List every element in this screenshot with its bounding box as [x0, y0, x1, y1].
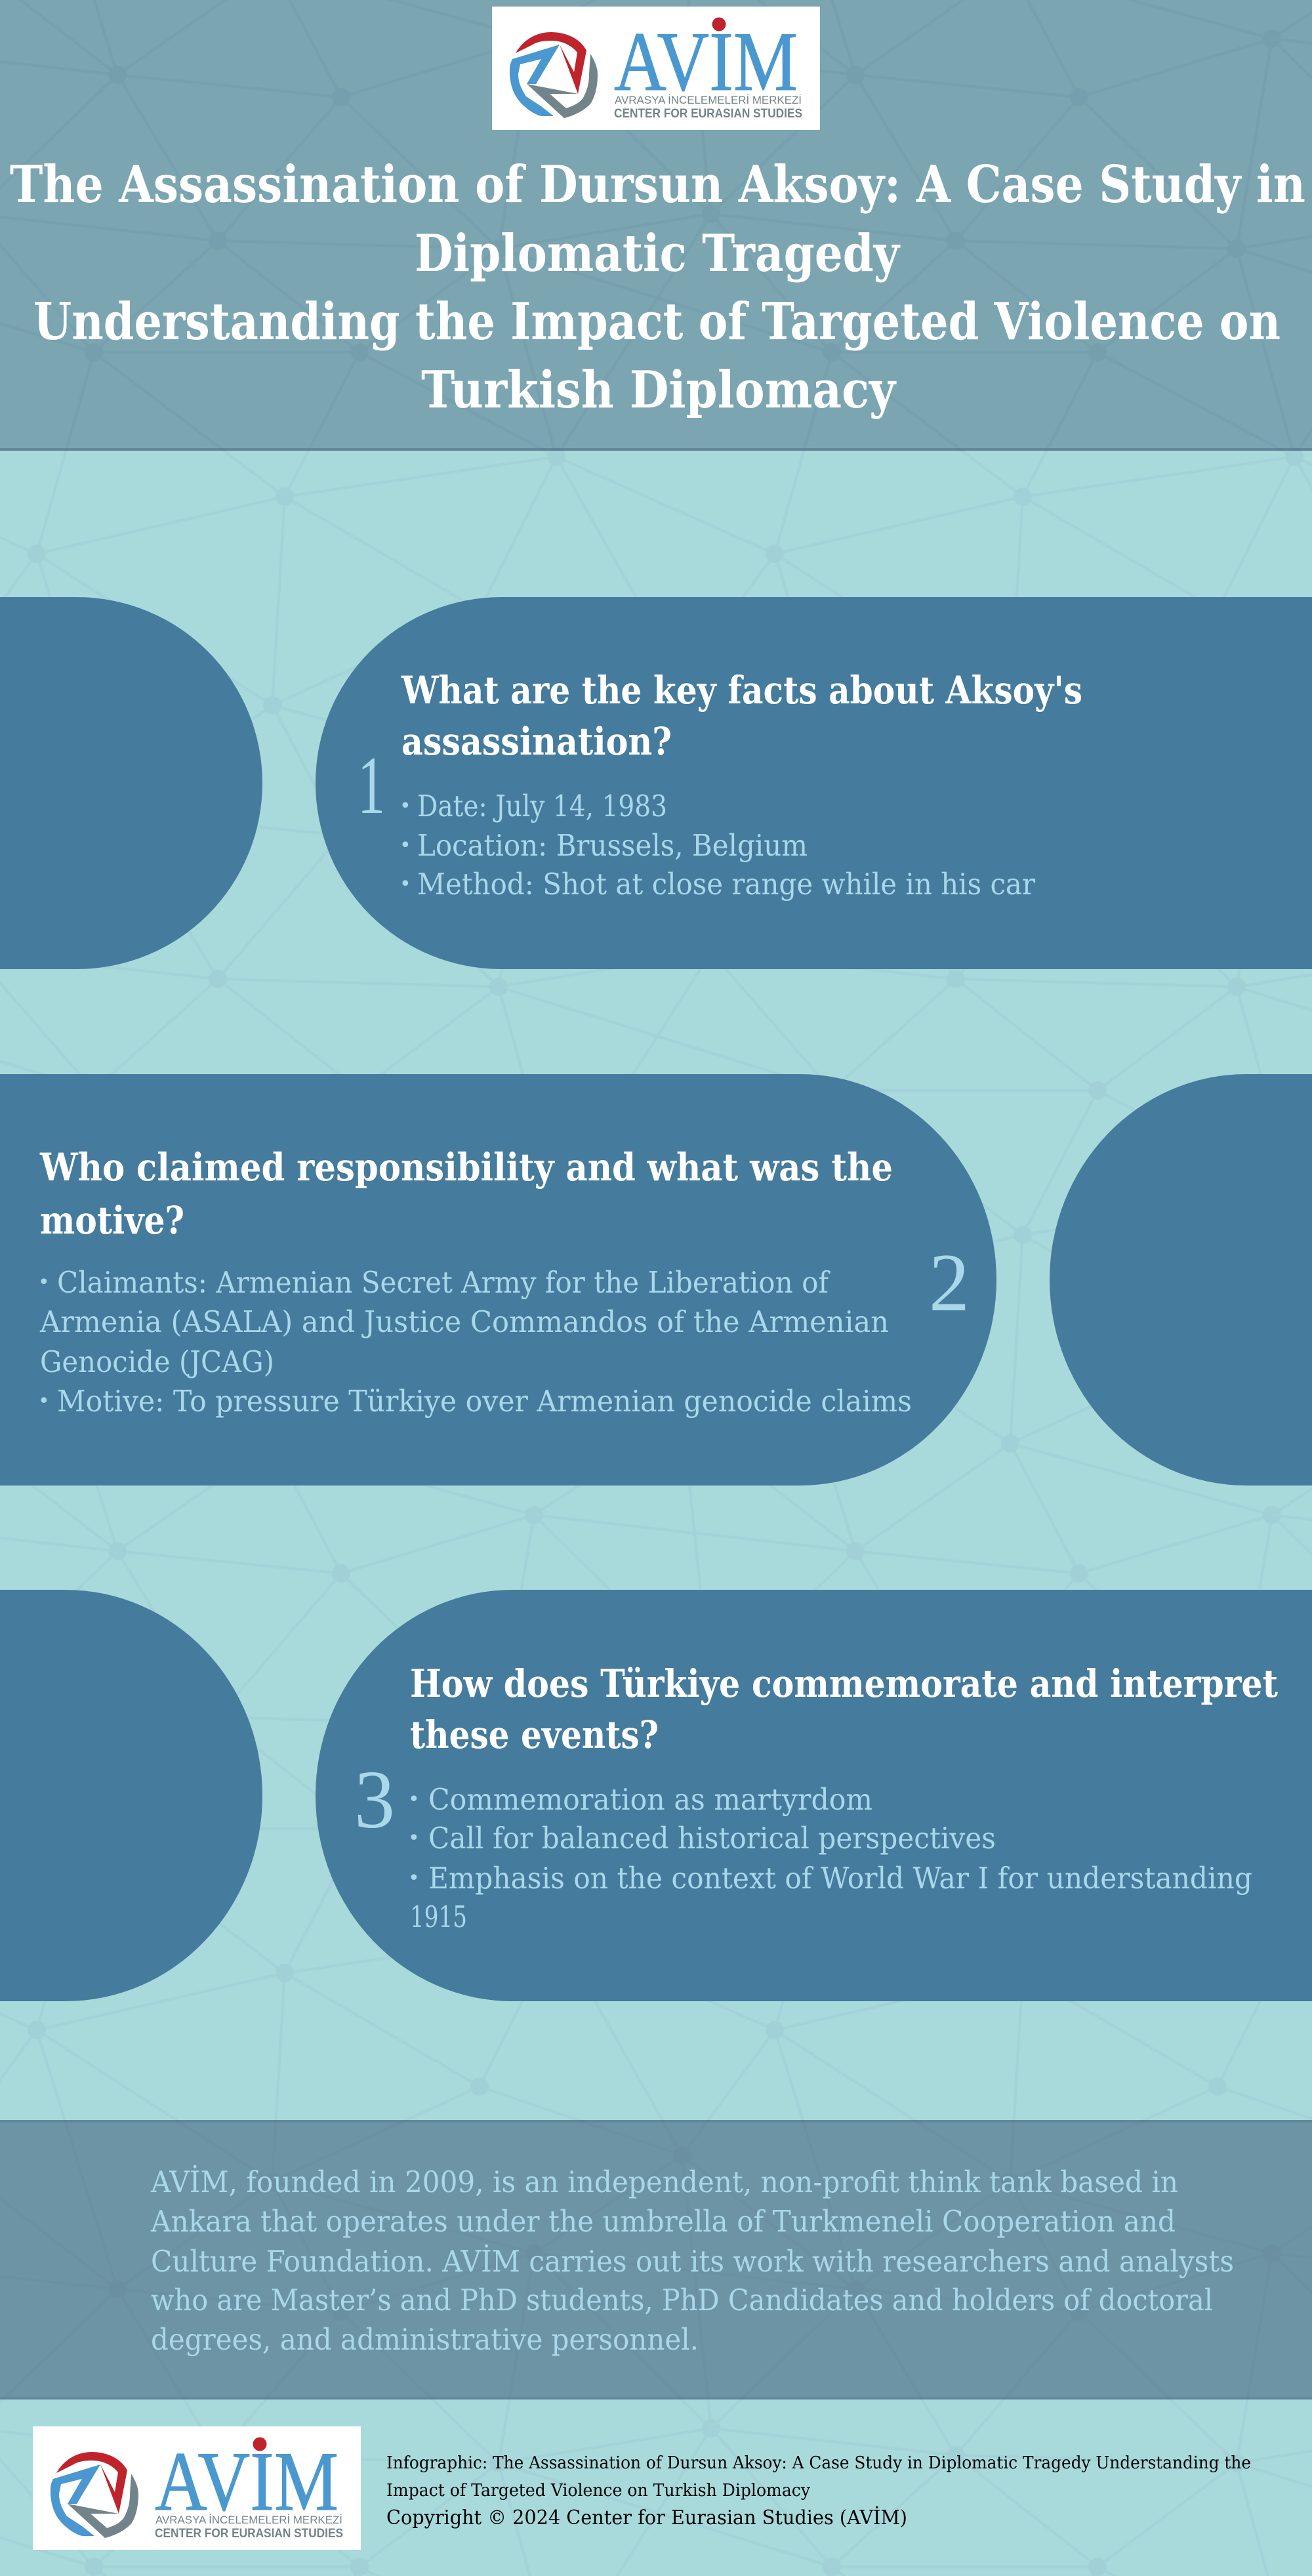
number 2: 2 [929, 1237, 970, 1329]
title: Turkish Diplomacy [421, 360, 897, 420]
text: section 1 bullets: • [400, 834, 411, 857]
number 3: 3 [354, 1755, 395, 1846]
panel: section 3 left blank pill [0, 1590, 262, 2001]
logo: footer AVİM: CENTER FOR EURASIAN STUDIES [155, 2527, 343, 2541]
text: section 1 bullets: • [400, 873, 411, 896]
text: section 3 bullets: • [408, 1867, 420, 1890]
text: about paragraph: degrees, and administrative personnel. [151, 2322, 699, 2357]
text: section 1 bullets [400, 789, 1035, 902]
panel: section 1 left blank pill [0, 597, 262, 969]
panel: section 1 [316, 597, 1312, 969]
text: section 3 bullets: • [408, 1827, 420, 1850]
panel: section 2 [0, 1074, 996, 1485]
text: section 2 bullets: • [38, 1390, 50, 1413]
text: section 3 bullets: 1915 [410, 1900, 467, 1934]
text: section 3 bullets [408, 1782, 1252, 1934]
heading: section 2: motive? [40, 1198, 184, 1243]
logo: footer AVİM: AVRASYA İNCELEMELERİ MERKEZİ [155, 2514, 342, 2526]
heading: section 2: Who claimed responsibility and what was the [39, 1145, 893, 1190]
text: section 1 bullets: Location: Brussels, Belgium [417, 828, 808, 863]
panel: header band [0, 0, 1312, 451]
title [10, 155, 1305, 420]
text: about paragraph: AVİM, founded in 2009, is an independent, non-profit think tank based in [150, 2165, 1178, 2199]
text: section 1 bullets: Method: Shot at close range while in his car [417, 867, 1035, 902]
text: about paragraph: who are Master’s and PhD students, PhD Candidates and holders of doctoral [151, 2283, 1213, 2317]
text: section 3 bullets: Emphasis on the context of World War I for understanding [428, 1861, 1252, 1896]
heading: section 1 [401, 668, 1082, 764]
text: footer credit: Copyright © 2024 Center for Eurasian Studies (AVİM) [386, 2506, 907, 2529]
text: about paragraph: Ankara that operates under the umbrella of Turkmeneli Cooperation and [150, 2204, 1176, 2239]
text: about paragraph [150, 2165, 1234, 2357]
heading: section 2 [39, 1145, 893, 1243]
text: section 3 bullets: • [408, 1788, 420, 1811]
logo: header AVİM: AVİM [614, 14, 798, 108]
logo: header AVİM: CENTER FOR EURASIAN STUDIES [614, 107, 802, 121]
heading: section 1: assassination? [401, 719, 672, 764]
logo: header AVİM: AVRASYA İNCELEMELERİ MERKEZİ [615, 94, 802, 106]
text: section 2 bullets [38, 1265, 912, 1419]
panel: section 3 [316, 1590, 1312, 2001]
text: section 2 bullets: • [38, 1271, 50, 1294]
heading: section 3 [410, 1661, 1278, 1757]
text: section 3 bullets: Call for balanced historical perspectives [428, 1821, 996, 1856]
text: section 2 bullets: Motive: To pressure Türkiye over Armenian genocide claims [57, 1384, 912, 1419]
text: section 2 bullets: Armenia (ASALA) and Justice Commandos of the Armenian [39, 1304, 889, 1339]
text: section 2 bullets: Genocide (JCAG) [40, 1344, 274, 1379]
text: footer credit: Infographic: The Assassination of Dursun Aksoy: A Case Study in Diplomatic Tragedy Understanding the [386, 2453, 1251, 2473]
text: section 3 bullets: Commemoration as martyrdom [428, 1782, 872, 1817]
text: section 1 bullets: Date: July 14, 1983 [417, 789, 667, 823]
text: footer credit [386, 2453, 1251, 2529]
panel: about AVİM [0, 2120, 1312, 2399]
heading: section 1: What are the key facts about Aksoy's [401, 668, 1082, 713]
text: about paragraph: Culture Foundation. AVİM carries out its work with researchers and analysts [151, 2244, 1234, 2279]
text: section 2 bullets: Claimants: Armenian Secret Army for the Liberation of [57, 1265, 830, 1300]
text: footer credit: Impact of Targeted Violence on Turkish Diplomacy [386, 2481, 810, 2501]
number 1: 1 [358, 740, 385, 831]
text: section 1 bullets: • [400, 795, 411, 818]
logo: footer AVİM [33, 2426, 361, 2550]
logo: header AVİM [492, 7, 820, 130]
logo: footer AVİM: AVİM [155, 2434, 338, 2528]
title: Diplomatic Tragedy [415, 224, 901, 283]
heading: section 3: these events? [410, 1713, 659, 1757]
panel: section 2 right blank pill [1050, 1074, 1312, 1485]
